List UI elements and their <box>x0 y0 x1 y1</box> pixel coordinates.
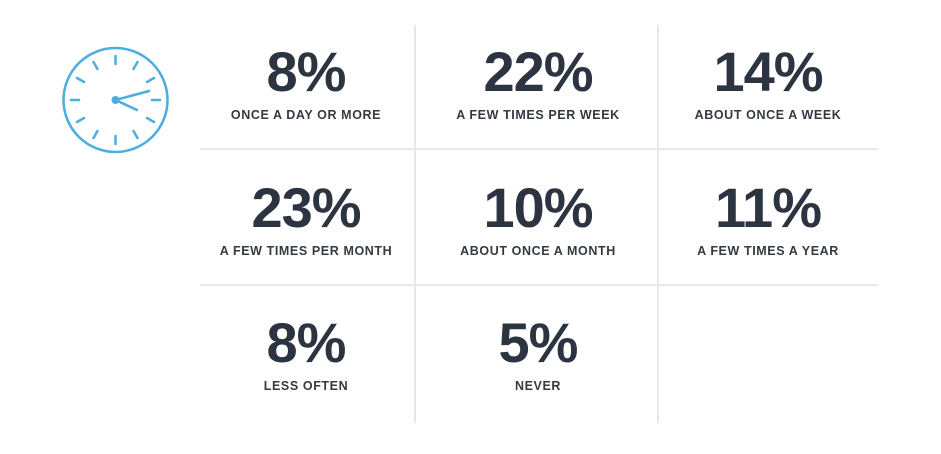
stat: few times a year: 11% <box>715 176 821 239</box>
stat: few times per month: A FEW TIMES PER MONTH <box>220 244 392 258</box>
stat: few times a year <box>697 176 839 258</box>
stat: once a day: 8% <box>267 40 345 103</box>
stat: few times per week <box>456 40 620 122</box>
stat: less often: 8% <box>267 311 345 374</box>
stat: once a week: 14% <box>713 40 823 103</box>
stat: once a month: 10% <box>483 176 593 239</box>
stat: few times per month <box>220 176 392 258</box>
stat: once a week: ABOUT ONCE A WEEK <box>695 108 841 122</box>
stat: once a month <box>460 176 616 258</box>
stat: never: NEVER <box>515 379 561 393</box>
stat: few times a year: A FEW TIMES A YEAR <box>697 244 839 258</box>
stat: once a month: ABOUT ONCE A MONTH <box>460 244 616 258</box>
stat: once a week <box>695 40 841 122</box>
stat: few times per month: 23% <box>251 176 361 239</box>
stat: once a day: ONCE A DAY OR MORE <box>231 108 381 122</box>
icon: clock <box>62 46 169 154</box>
stat: few times per week: 22% <box>483 40 593 103</box>
stat: never: 5% <box>499 311 577 374</box>
stat: less often: LESS OFTEN <box>264 379 348 393</box>
stat: once a day <box>231 40 381 122</box>
stat: few times per week: A FEW TIMES PER WEEK <box>456 108 620 122</box>
